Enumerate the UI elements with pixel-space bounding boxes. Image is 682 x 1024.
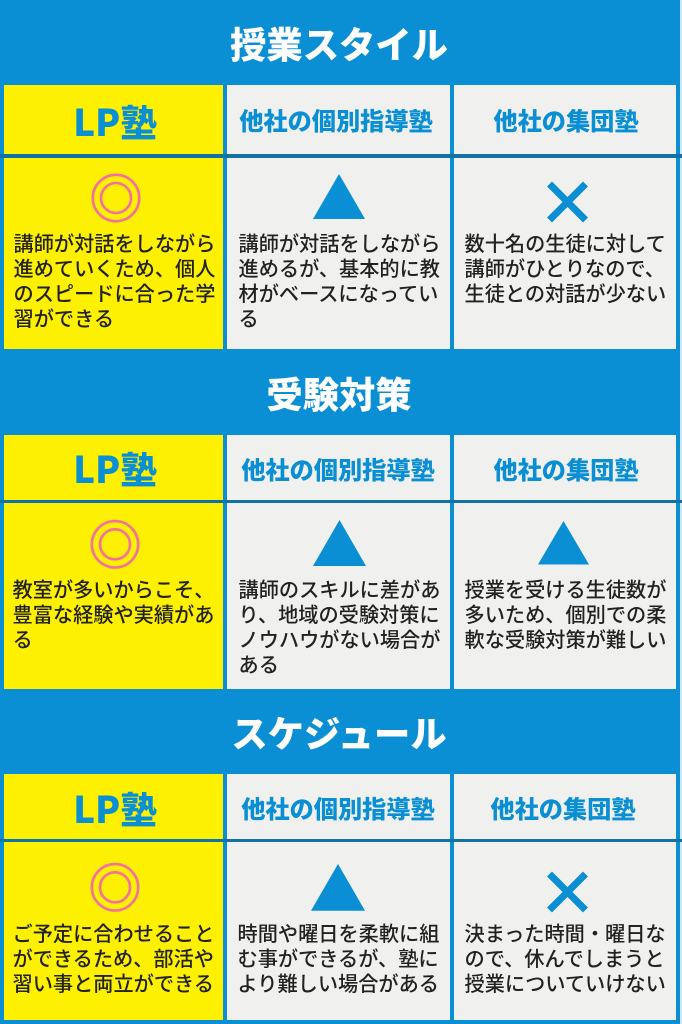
text: 個別指導塾 スケジュール: 時間や曜日を柔軟に組 xyxy=(238,918,439,946)
header label: 他社の集団塾: 他社の集団塾 xyxy=(490,790,636,825)
header label: 他社の個別指導塾: 他社の個別指導塾 xyxy=(239,102,433,137)
text: LP塾 授業スタイル xyxy=(14,228,215,332)
text: 集団塾 授業スタイル: 数十名の生徒に対して xyxy=(464,228,666,256)
heading: 受験対策: 受験対策 xyxy=(266,367,412,419)
text: 個別指導塾 受験対策: ノウハウがない場合が xyxy=(238,624,440,652)
header cell: 他社の個別指導塾 xyxy=(227,774,450,839)
header cell: LP塾 xyxy=(4,434,223,500)
header label: LP塾: LP塾 xyxy=(73,781,157,834)
body cell: 個別指導塾 xyxy=(227,503,450,689)
icon: double circle xyxy=(92,174,140,222)
text: 集団塾 授業スタイル xyxy=(464,228,666,306)
text: 個別指導塾 受験対策 xyxy=(238,574,440,678)
body cell: LP塾 xyxy=(4,842,223,1020)
header label: 他社の集団塾: 他社の集団塾 xyxy=(493,102,639,137)
text: LP塾 受験対策: 豊富な経験や実績があ xyxy=(12,598,214,628)
text: 個別指導塾 スケジュール: む事ができるが、塾に xyxy=(238,942,439,972)
text: LP塾 スケジュール xyxy=(12,918,214,996)
text: LP塾 スケジュール: ができるため、部活や xyxy=(12,942,214,972)
header cell: 他社の集団塾 xyxy=(454,85,676,154)
header cell: 他社の個別指導塾 xyxy=(227,434,450,500)
text: LP塾 受験対策: 教室が多いからこそ、 xyxy=(12,574,214,602)
header cell: LP塾 xyxy=(4,774,223,839)
text: LP塾 授業スタイル: のスピードに合った学 xyxy=(14,278,215,306)
header cell: 他社の集団塾 xyxy=(454,434,676,500)
text: 集団塾 スケジュール: 授業についていけない xyxy=(464,968,666,996)
text: 集団塾 受験対策 xyxy=(464,574,666,652)
header label: 他社の集団塾: 他社の集団塾 xyxy=(493,451,639,486)
text: 個別指導塾 授業スタイル: 講師が対話をしながら xyxy=(238,228,440,256)
text: 集団塾 スケジュール: ので、休んでしまうと xyxy=(464,942,665,972)
icon: triangle xyxy=(313,520,366,566)
text: LP塾 授業スタイル: 講師が対話をしながら xyxy=(14,228,215,256)
text: 個別指導塾 授業スタイル: 材がベースになってい xyxy=(238,278,438,306)
header label: LP塾: LP塾 xyxy=(73,441,157,494)
header label: 他社の個別指導塾: 他社の個別指導塾 xyxy=(241,790,435,825)
text: LP塾 受験対策 xyxy=(12,574,214,652)
body cell: 集団塾 xyxy=(454,158,676,349)
text: 集団塾 受験対策: 軟な受験対策が難しい xyxy=(464,624,666,652)
body cell: LP塾 xyxy=(4,503,223,689)
panel: 授業スタイル xyxy=(0,17,682,349)
text: 個別指導塾 授業スタイル: る xyxy=(238,302,259,332)
text: LP塾 受験対策: る xyxy=(12,624,33,652)
text: LP塾 スケジュール: ご予定に合わせること xyxy=(12,918,214,946)
header cell: 他社の集団塾 xyxy=(454,774,676,839)
panel: 受験対策 xyxy=(0,367,682,689)
body cell: 個別指導塾 xyxy=(227,842,450,1020)
text: 集団塾 授業スタイル: 講師がひとりなので、 xyxy=(464,252,665,282)
text: LP塾 スケジュール: 習い事と両立ができる xyxy=(12,968,214,996)
text: 個別指導塾 スケジュール xyxy=(238,918,439,996)
text: LP塾 授業スタイル: 進めていくため、個人 xyxy=(14,252,215,282)
icon: double circle xyxy=(90,520,140,569)
text: 集団塾 スケジュール xyxy=(464,918,666,996)
text: LP塾 授業スタイル: 習ができる xyxy=(14,302,114,332)
text: 集団塾 受験対策: 多いため、個別での柔 xyxy=(464,598,666,628)
text: 個別指導塾 授業スタイル: 進めるが、基本的に教 xyxy=(238,252,440,282)
text: 個別指導塾 受験対策: 講師のスキルに差があ xyxy=(238,574,440,602)
header cell: 他社の個別指導塾 xyxy=(227,85,450,154)
text: 個別指導塾 スケジュール: より難しい場合がある xyxy=(238,968,439,996)
icon: triangle xyxy=(313,174,365,219)
text: 個別指導塾 授業スタイル xyxy=(238,228,440,332)
text: 個別指導塾 受験対策: り、地域の受験対策に xyxy=(238,598,440,628)
body cell: 集団塾 xyxy=(454,842,676,1020)
icon: triangle xyxy=(538,521,589,564)
right edge strip xyxy=(680,0,682,1024)
heading: スケジュール: スケジュール xyxy=(231,706,447,758)
header cell: LP塾 xyxy=(4,85,223,154)
body cell: 集団塾 xyxy=(454,503,676,689)
text: 個別指導塾 受験対策: ある xyxy=(238,648,279,678)
text: 集団塾 受験対策: 授業を受ける生徒数が xyxy=(464,574,666,602)
header label: LP塾: LP塾 xyxy=(73,94,157,147)
text: 集団塾 授業スタイル: 生徒との対話が少ない xyxy=(464,278,666,306)
heading: 授業スタイル: 授業スタイル xyxy=(230,17,448,69)
text: 集団塾 スケジュール: 決まった時間・曜日な xyxy=(464,918,666,946)
header label: 他社の個別指導塾: 他社の個別指導塾 xyxy=(241,451,435,486)
icon: cross xyxy=(547,182,588,222)
body cell: 個別指導塾 xyxy=(227,158,450,349)
body cell: LP塾 xyxy=(4,158,223,349)
